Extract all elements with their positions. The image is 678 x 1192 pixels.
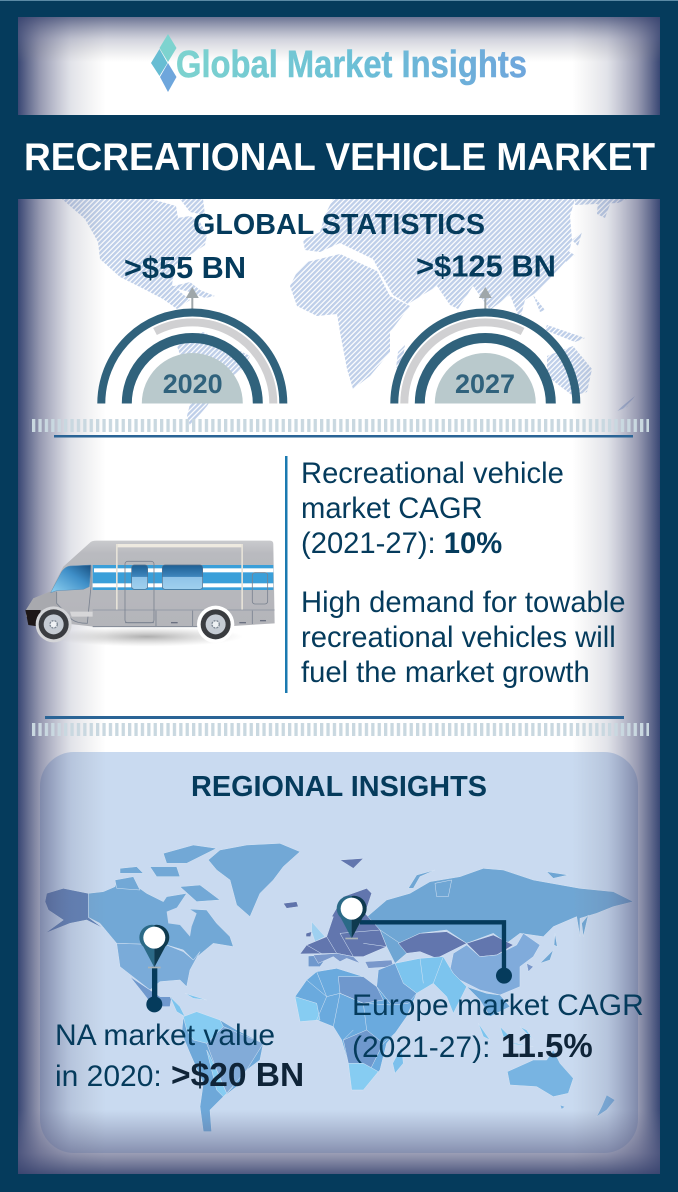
icon: recreational vehicle [25,541,275,647]
text: CAGR: market CAGR [301,493,483,525]
pin: Europe to Asia connector [337,896,512,984]
map: Eurasia, Africa, Oceania [295,858,633,1117]
vertical rule [285,456,288,693]
heading: regional insights: REGIONAL INSIGHTS [191,771,487,803]
stat: 2027 value: >$125 BN [416,248,556,284]
hatched world map [62,199,635,426]
stat: 2020 value: >$55 BN [124,250,246,285]
text: Europe CAGR: (2021-27): [352,1031,490,1064]
text: towable demand: fuel the market growth [301,657,590,689]
arch gauge: 2027 [394,287,576,404]
text: towable demand: High demand for towable [301,587,626,619]
panel: regional insights background [40,752,638,1153]
text: towable demand: recreational vehicles will [301,622,616,654]
text: NA market value: in 2020: [55,1060,162,1093]
logo wordmark: Global Market Insights [176,44,527,86]
text: CAGR: (2021-27): 10% [301,528,502,560]
arch gauge: 2020: 2020 [163,369,223,399]
divider: top ticks [29,419,649,432]
text: Europe CAGR: Europe market CAGR [352,989,644,1022]
title: RECREATIONAL VEHICLE MARKET [24,136,655,179]
heading: global statistics: GLOBAL STATISTICS [193,209,485,241]
text: CAGR: Recreational vehicle [301,458,564,490]
divider: lower ticks [29,716,649,736]
logo [151,34,527,92]
arch gauge: 2020 [101,287,283,404]
icon: logo diamonds [151,34,176,92]
text: NA market value: >$20 BN [171,1057,304,1094]
text: Europe CAGR: 11.5% [501,1027,593,1064]
regional world map [45,843,633,1132]
arch gauge: 2027: 2027 [455,369,515,399]
text: NA market value: NA market value [55,1019,275,1052]
pin: North America [139,925,169,1012]
map: Americas [45,843,328,1132]
